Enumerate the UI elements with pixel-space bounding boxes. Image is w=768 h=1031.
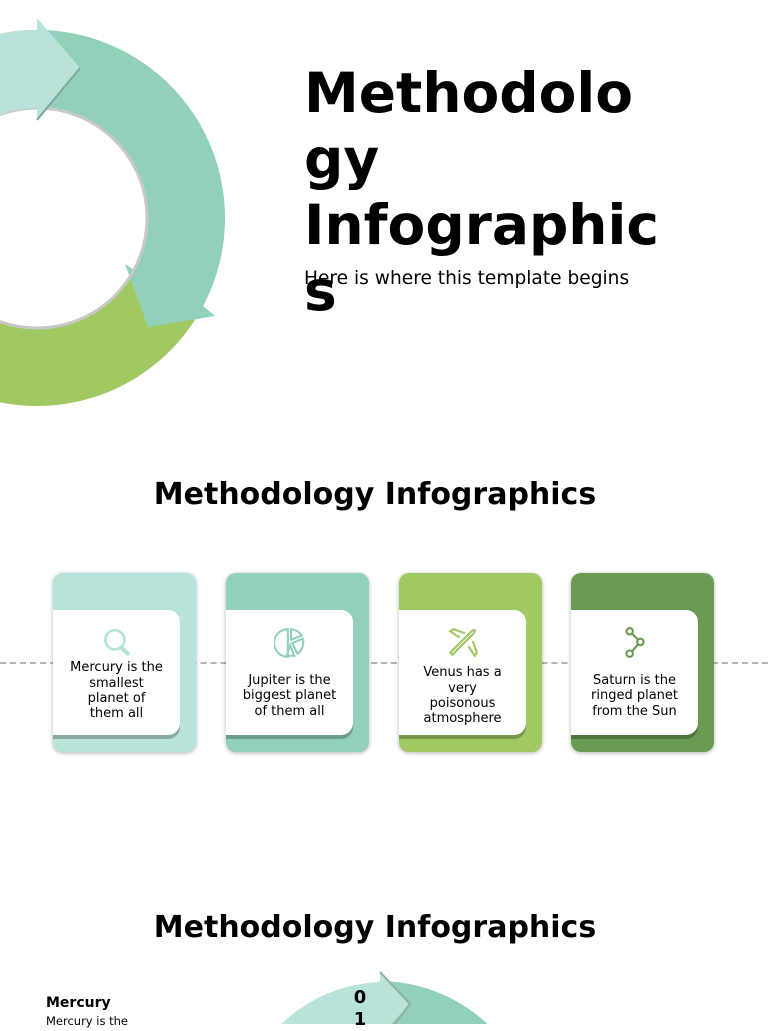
icon: plane [448,628,478,658]
title: gy [304,127,379,191]
segment: light teal arrow [0,18,80,218]
text: Venus has a very poisonous atmosphere [423,665,502,726]
segment: teal arrow [37,30,225,327]
text: Saturn is the ringed planet from the Sun [591,673,678,719]
text [70,660,163,721]
icon: nodes [625,627,645,658]
inner ring edge [0,108,147,328]
cycle diagram top [0,18,225,406]
card 3 [399,573,542,752]
title: s [304,259,337,323]
text block: Mercury: Mercury is the [46,1014,128,1028]
title: Infographic [304,193,659,257]
number 01 [354,987,366,1030]
number 01: 0 [354,987,366,1008]
heading: section 2: Methodology Infographics [154,910,596,945]
heading: section 1: Methodology Infographics [154,477,596,512]
icon: pie chart [274,628,304,658]
card 1 [53,573,196,752]
number 01: 1 [354,1009,366,1030]
text: Jupiter is the biggest planet of them all [243,673,336,719]
text: them all [90,706,143,721]
subtitle: Here is where this template begins [304,268,629,289]
text: planet of [88,691,145,706]
card 4 [571,573,714,752]
card 2 [226,573,369,752]
cycle diagram bottom [282,972,488,1024]
segment: green [0,30,225,406]
segment: light teal [260,972,410,1031]
segment: teal [270,981,510,1031]
title [304,61,659,323]
title: Methodolo [304,61,633,125]
dashed line [0,662,768,664]
text block: Mercury [46,995,128,1028]
icon: magnifier [104,628,130,656]
text block: Mercury: Mercury [46,995,111,1011]
text: Mercury is the smallest [70,660,163,691]
